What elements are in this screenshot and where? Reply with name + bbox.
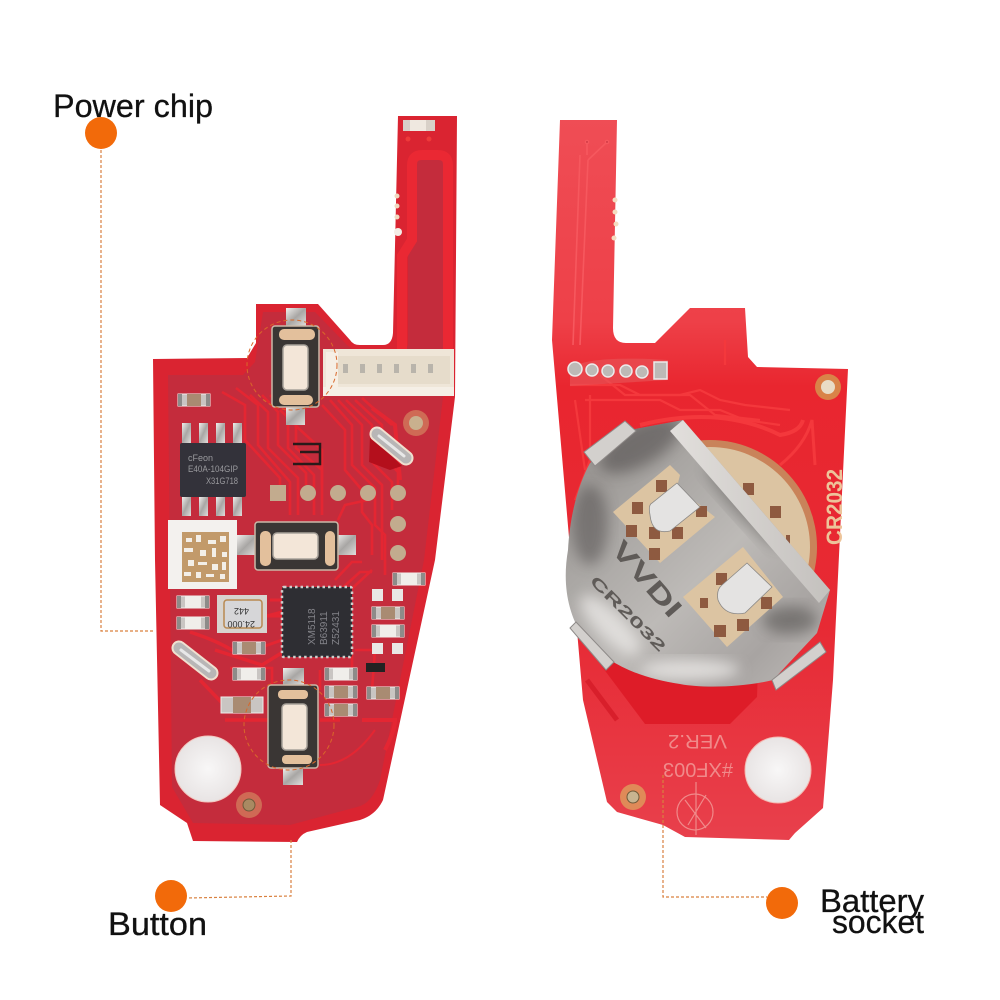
board outline [153,116,457,842]
mounting pad [236,792,262,818]
crystal top [377,434,406,458]
right PCB board [552,120,848,840]
antenna LED [403,120,435,142]
leader line [187,840,291,898]
#XF003 silkscreen: #XF003 [663,758,733,780]
clip tabs [584,421,636,466]
callout: Power chip [53,88,213,631]
oscillator: 442 [234,606,249,616]
SOIC chip: X31G718 [206,476,238,486]
silkscreen mark [293,444,320,464]
tactile switch top [272,308,319,425]
spring tab 1 [649,483,700,532]
logo [677,782,713,835]
board outline [552,120,848,840]
embossed text: VVDI [605,534,688,623]
callout: Battery socket [663,775,924,940]
top right pad [815,374,841,400]
bottom dark area [587,660,758,724]
QFN chip [282,587,352,657]
dot [766,887,798,919]
oscillator: 24.000 [227,619,255,629]
SOIC chip: cFeon [188,453,213,463]
callout: Button [108,840,291,942]
QFN chip: Z52431 [331,611,342,645]
SOIC chip: E40A-104GIP [188,464,238,474]
capacitors [177,573,425,716]
dot [85,117,117,149]
mounting hole [175,736,241,802]
left PCB board [153,116,457,842]
VER.2 silkscreen: VER.2 [668,730,727,751]
bottom switch [268,668,318,785]
solder test pads [270,485,406,561]
dot [155,880,187,912]
crystal bottom [179,648,211,673]
CR2032 silkscreen: CR2032 [822,469,847,545]
label: Power chip: Power chip [53,88,213,124]
leader line [663,775,767,897]
QFN chip: XM5118 [307,608,318,645]
QFN chip: B63911 [319,611,330,645]
spring tab 2 [718,563,772,614]
connector [323,349,454,396]
window 2 [683,547,783,647]
antenna traces [573,140,608,345]
bare copper disc [603,440,817,654]
antenna U stripe [402,155,448,350]
clip bar highlight [670,420,830,603]
label: socket: socket [832,904,924,940]
antenna edge bumps [394,194,402,236]
board inner dark area [168,160,443,825]
battery clip: CR2032 [586,573,669,656]
solder pin row [568,359,668,386]
SOIC chip [180,423,246,516]
dashed circle bottom [244,680,334,770]
antenna edge bumps [612,198,618,240]
circuit traces [190,388,400,765]
small capacitor top left [178,394,210,406]
label: Battery: Battery [820,883,924,919]
battery clip [566,405,830,690]
mounting hole [745,737,811,803]
dashed circle top [247,320,337,410]
data matrix label [168,520,237,589]
oscillator [217,595,267,633]
leader line [101,150,155,631]
window 1 [613,465,715,563]
label: Button: Button [108,906,207,942]
middle switch [237,522,356,570]
crystal dark patch [369,436,402,470]
via pad top right [403,410,429,436]
mounting pad [620,784,646,810]
upper traces [570,340,815,500]
